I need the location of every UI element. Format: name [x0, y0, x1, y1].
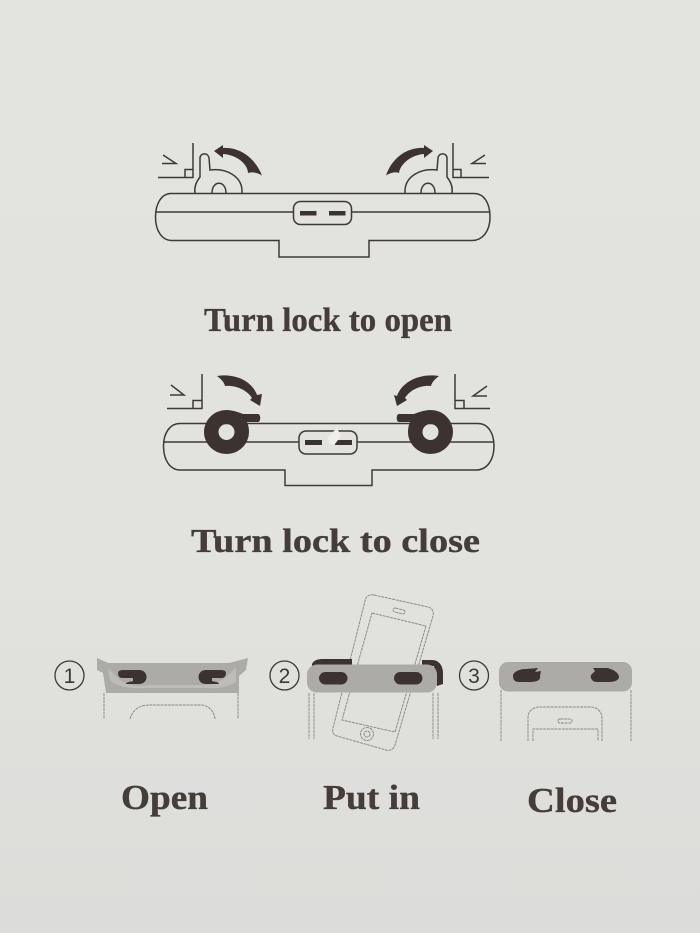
left slot	[319, 672, 348, 684]
left bracket	[158, 143, 193, 178]
heading: turn lock to close: Turn lock to close	[191, 523, 480, 560]
label: put in: Put in	[323, 778, 420, 817]
right open lock	[405, 154, 452, 193]
diagram: turn lock to open	[156, 143, 490, 257]
step 2: put in	[270, 595, 443, 750]
right bracket	[455, 374, 490, 408]
right closed lock	[397, 410, 453, 454]
band highlight	[108, 667, 236, 688]
side walls	[309, 693, 438, 739]
number 1: 1	[64, 665, 75, 688]
left open lock	[195, 154, 242, 193]
device body	[164, 424, 494, 486]
left closed lock	[204, 410, 260, 454]
phone tilted	[333, 595, 433, 750]
phone outline	[104, 693, 238, 719]
left bracket	[167, 374, 202, 408]
right slot	[198, 670, 226, 684]
heading: turn lock to open: Turn lock to open	[204, 302, 452, 339]
left slot	[118, 670, 146, 684]
lock band	[499, 662, 632, 692]
label: close: Close	[527, 781, 617, 820]
centre slider	[294, 202, 352, 224]
label: open: Open	[121, 778, 208, 817]
open latches	[312, 659, 443, 686]
number 1	[55, 661, 84, 690]
number 2	[270, 661, 299, 690]
centre slider	[299, 428, 357, 454]
lock band	[97, 658, 248, 693]
arrow: right close	[394, 375, 439, 406]
phone in holder	[501, 690, 631, 741]
number 3: 3	[468, 665, 480, 688]
device body	[156, 194, 490, 257]
left slot	[513, 668, 541, 682]
step 1: open	[55, 658, 248, 719]
right bracket	[453, 143, 489, 178]
arrow: left close	[217, 375, 262, 406]
right slot	[591, 668, 619, 682]
arrow: left open	[214, 145, 262, 176]
right slot	[394, 672, 422, 684]
number 3	[460, 661, 488, 690]
step 3: close	[460, 661, 632, 741]
arrow: right open	[386, 145, 433, 176]
number 2: 2	[279, 665, 290, 688]
diagram: turn lock to close	[164, 374, 494, 486]
lock band	[307, 664, 437, 692]
